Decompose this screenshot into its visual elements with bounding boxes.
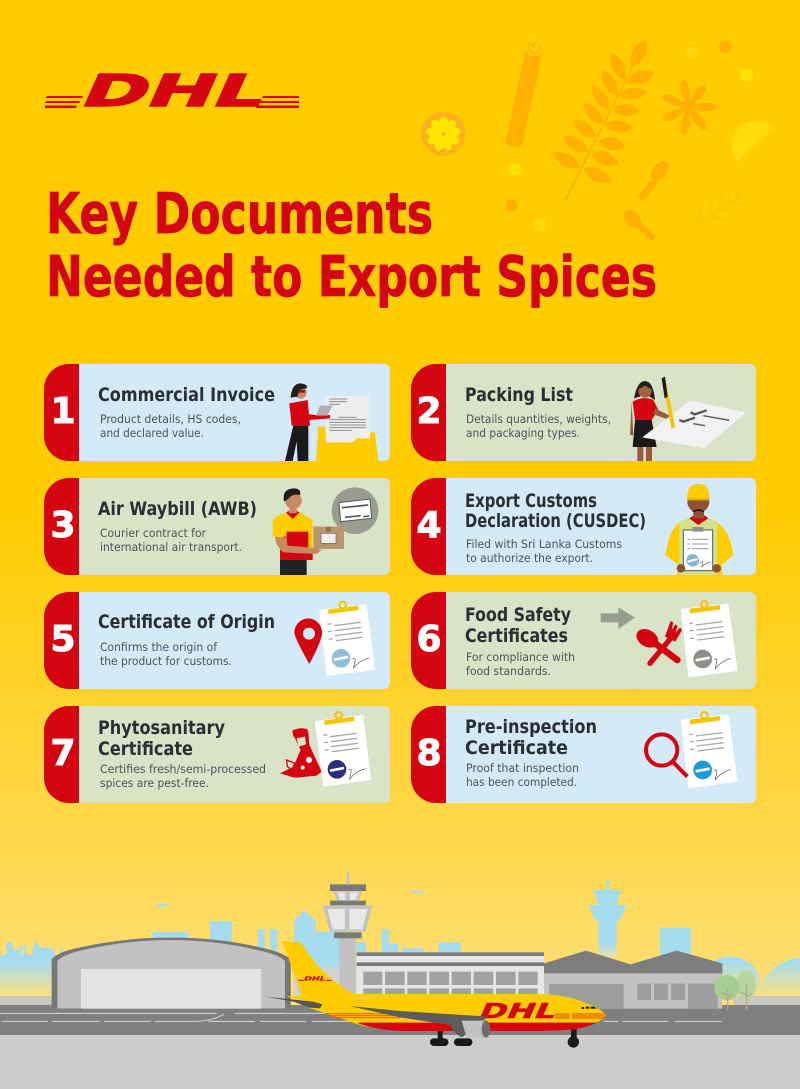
panel: 8 Pre-inspection Certificate: [411, 706, 756, 803]
distant plane right: [410, 889, 429, 894]
arrow: [601, 607, 635, 629]
apron strip: [0, 996, 800, 1006]
panel: 1 Commercial Invoice: [44, 364, 390, 461]
panel: 7 Phytosanitary Certificate: Phytosanitary: [98, 717, 226, 739]
DHL logo: DHL: [73, 66, 277, 117]
panel: 8 Pre-inspection Certificate: has been completed.: [466, 775, 577, 789]
panel: 6 Food Safety Certificates: 6: [416, 619, 442, 660]
fuselage DHL lettering: DHL: [475, 999, 562, 1023]
title: Needed to Export Spices: [46, 245, 657, 310]
panel: 5 Certificate of Origin: the product for customs.: [100, 654, 232, 668]
panel: 4 Export Customs Declaration: to authorize the export.: [466, 551, 593, 565]
illustration: magnifier and signed certificate: [646, 712, 738, 788]
DHL cargo plane: [265, 941, 606, 1048]
hangar: [52, 938, 291, 1009]
panel: 6 Food Safety Certificates: Certificates: [465, 625, 568, 647]
panel: 4 Export Customs Declaration: [411, 478, 756, 575]
city skyline: [0, 910, 461, 996]
panel: 6 Food Safety Certificates: food standards.: [466, 664, 551, 678]
icon: cloves: [620, 157, 673, 239]
spice dots: [506, 40, 754, 231]
icon: star anise: [661, 79, 716, 136]
ground: [0, 1035, 800, 1089]
panel: 8 Pre-inspection Certificate: 8: [416, 733, 442, 774]
illustration: courier with parcel and waybill: [273, 487, 378, 575]
illustration: woman with laptop and documents: [285, 383, 378, 461]
panel: 2 Packing List: Packing List: [465, 384, 573, 406]
icon: cinnamon stick: [505, 39, 543, 147]
panel: 1 Commercial Invoice: and declared value.: [100, 426, 204, 440]
panel: 1 Commercial Invoice: Commercial Invoice: [98, 384, 275, 406]
warehouse: [544, 951, 722, 1009]
panel: 7 Phytosanitary Certificate: [44, 706, 390, 803]
panel: 3 Air Waybill: [44, 478, 390, 575]
panel: 3 Air Waybill: 3: [50, 505, 76, 546]
panel: 5 Certificate of Origin: [44, 592, 390, 689]
illustration: map pin and signed certificate: [294, 602, 375, 676]
panel: 3 Air Waybill: Air Waybill (AWB): [98, 498, 257, 520]
panel: 3 Air Waybill: international air transport.: [100, 540, 242, 554]
panel: 4 Export Customs Declaration: Export Customs: [465, 490, 597, 512]
terminal building: [357, 952, 544, 1009]
panel: 2 Packing List: 2: [416, 391, 442, 432]
decorative spices: [421, 37, 775, 239]
landing gear: [430, 1028, 577, 1046]
tail DHL lettering: DHL: [303, 976, 327, 982]
icon: citrus slice: [421, 112, 465, 156]
trees: [714, 970, 756, 1010]
illustration: lab flask and signed certificate: [280, 712, 371, 787]
panel: 4 Export Customs Declaration: Filed with Sri Lanka Customs: [466, 537, 622, 551]
panel: 7 Phytosanitary Certificate: Certificate: [98, 738, 193, 760]
title: [46, 182, 657, 310]
panel: 6 Food Safety Certificates: For compliance with: [466, 650, 575, 664]
illustration: woman with pencil and checklist: [630, 377, 746, 461]
airport scene: [0, 873, 800, 1089]
panel: 6 Food Safety Certificates: Food Safety: [465, 604, 572, 626]
illustration: cutlery and signed certificate: [633, 601, 738, 677]
panel: 8 Pre-inspection Certificate: Proof that inspection: [466, 761, 579, 775]
panel: 8 Pre-inspection Certificate: Certificate: [465, 737, 568, 759]
panel: 4 Export Customs Declaration: 4: [416, 505, 442, 546]
icon: leafy branch: [549, 37, 657, 199]
panel: 3 Air Waybill: Courier contract for: [100, 526, 206, 540]
runway markings: [0, 1013, 722, 1021]
icon: lemon wedge: [732, 121, 775, 162]
panel: 5 Certificate of Origin: Certificate of Origin: [98, 611, 275, 633]
title: Key Documents: [46, 182, 433, 247]
panel: 6 Food Safety Certificates: [411, 592, 756, 689]
panel: 1 Commercial Invoice: Product details, HS codes,: [100, 412, 241, 426]
icon: outline leaf: [690, 192, 745, 229]
distant control tower: [588, 880, 627, 957]
panel: 5 Certificate of Origin: Confirms the origin of: [100, 640, 218, 654]
panel: 1 Commercial Invoice: 1: [50, 391, 76, 432]
panel: 2 Packing List: [411, 364, 756, 461]
tarmac: [0, 1005, 800, 1036]
control tower: [293, 873, 372, 997]
panel: 8 Pre-inspection Certificate: Pre-inspection: [465, 716, 597, 738]
panel: 2 Packing List: and packaging types.: [466, 426, 580, 440]
distant block and domes: [660, 928, 800, 996]
panel: 2 Packing List: Details quantities, weights,: [466, 412, 611, 426]
illustration: customs officer with clipboard: [666, 484, 733, 575]
panel: 7 Phytosanitary Certificate: Certifies fresh/semi-processed: [100, 762, 266, 776]
panel: 4 Export Customs Declaration: Declaration (CUSDEC): [465, 510, 646, 532]
panel: 5 Certificate of Origin: 5: [50, 619, 76, 660]
panel: 7 Phytosanitary Certificate: 7: [50, 733, 76, 774]
distant plane left: [153, 902, 171, 908]
panel: 7 Phytosanitary Certificate: spices are pest-free.: [100, 776, 209, 790]
